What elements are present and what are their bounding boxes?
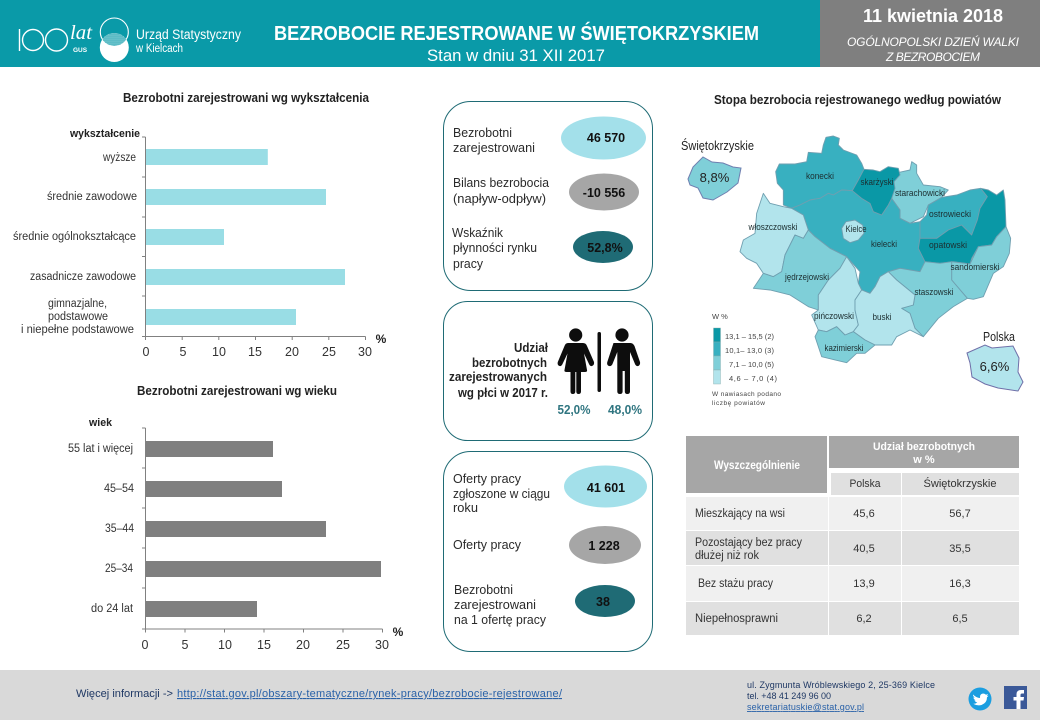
bubble: -10 556: -10 556 xyxy=(583,186,625,200)
category labels: 25–34 xyxy=(105,563,134,575)
panel: unemployment summary xyxy=(444,102,652,290)
legend: 7,1 – 10,0 (5) xyxy=(729,360,774,369)
category labels xyxy=(68,443,135,615)
label: Polska: Polska xyxy=(983,330,1015,344)
map panel xyxy=(681,93,1023,407)
category labels: wyższe xyxy=(102,152,136,164)
legend: 4,6 – 7,0 (4) xyxy=(729,374,778,383)
map title: Stopa bezrobocia rejestrowanego według powiatów xyxy=(714,93,1001,107)
legend: W % xyxy=(712,312,728,321)
row: Mieszkający na wsi: Mieszkający na wsi xyxy=(695,508,785,520)
logo: 100 lat GUS: GUS xyxy=(73,47,88,54)
category labels: gimnazjalne, xyxy=(48,298,107,310)
label: unemployed per offer: zarejestrowani xyxy=(454,597,536,612)
title: BEZROBOCIE REJESTROWANE W ŚWIĘTOKRZYSKIEM xyxy=(274,21,759,45)
category labels: średnie zawodowe xyxy=(47,191,137,203)
row: Pozostający bez pracy: dłużej niż rok xyxy=(695,550,759,562)
county labels: kielecki xyxy=(871,239,897,250)
row: Pozostający bez pracy xyxy=(686,531,1019,565)
tick labels: 25 xyxy=(322,345,336,359)
tick labels xyxy=(143,345,372,359)
label: balance: (napływ-odpływ) xyxy=(453,191,546,206)
county labels: włoszczowski xyxy=(748,222,798,233)
logo: Urząd Statystyczny xyxy=(100,18,241,62)
value: men 48,0%: 48,0% xyxy=(608,403,642,417)
label: balance: Bilans bezrobocia xyxy=(453,175,550,190)
heading: gender share: Udział xyxy=(514,341,548,355)
county labels: kazimierski xyxy=(824,343,864,354)
tick labels xyxy=(142,638,389,652)
county labels: buski xyxy=(872,312,892,323)
legend: 10,1– 13,0 (3) xyxy=(725,346,774,355)
category labels: 35–44 xyxy=(105,523,135,535)
table xyxy=(686,436,1019,635)
row: Mieszkający na wsi: 45,6 xyxy=(853,508,875,520)
heading: gender share: wg płci w 2017 r. xyxy=(457,386,548,400)
bubble: 41 601: 41 601 xyxy=(587,481,625,495)
county labels: skarżyski xyxy=(860,177,894,188)
bubble: 52,8%: 52,8% xyxy=(587,241,623,255)
table header: Świętokrzyskie xyxy=(924,477,996,490)
chart title: Bezrobotni zarejestrowani wg wykształcenia xyxy=(123,91,370,105)
row: Niepełnosprawni: 6,5 xyxy=(952,613,968,625)
header band xyxy=(0,0,820,67)
legend xyxy=(712,312,781,407)
county labels: sandomierski xyxy=(950,262,1000,273)
bubble: 52,8% xyxy=(573,231,633,263)
label: registered unemployed: zarejestrowani xyxy=(453,140,535,155)
axes xyxy=(142,137,366,340)
row: Bez stażu pracy: 16,3 xyxy=(949,578,971,590)
tick labels: 10 xyxy=(218,638,232,652)
axis label: wiek: wiek xyxy=(88,417,113,429)
logo: Urząd Statystyczny: w Kielcach xyxy=(135,43,183,55)
date box: Z BEZROBOCIEM xyxy=(885,50,980,64)
category labels xyxy=(13,152,137,336)
heading: gender share: bezrobotnych xyxy=(472,356,547,370)
more information link: Więcej informacji -> xyxy=(76,688,173,700)
heading: gender share: zarejestrowanych xyxy=(449,370,547,384)
row: Mieszkający na wsi xyxy=(686,497,1019,530)
legend: 13,1 – 15,5 (2) xyxy=(725,332,774,341)
more information link: http://stat.gov.pl/obszary-tematyczne/rynek-pracy/bezrobocie-rejestrowane/ xyxy=(177,688,563,700)
county labels xyxy=(748,171,1000,354)
bubble: 41 601 xyxy=(564,466,647,508)
tick labels: 0 xyxy=(142,638,149,652)
region shape: Świętokrzyskie 8,8% xyxy=(688,157,741,200)
label: offers: Oferty pracy xyxy=(453,537,521,552)
row: Bez stażu pracy xyxy=(686,566,1019,601)
contact details: sekretariatuskie@stat.gov.pl xyxy=(747,702,864,712)
chart: age xyxy=(68,384,404,652)
region shape: Świętokrzyskie 8,8%: 8,8% xyxy=(700,170,730,185)
row: Pozostający bez pracy: 35,5 xyxy=(949,543,971,555)
county labels: Kielce xyxy=(846,224,866,235)
bubble: 46 570 xyxy=(561,116,646,160)
divider xyxy=(598,332,601,392)
bubble: 1 228: 1 228 xyxy=(588,539,620,553)
bars xyxy=(146,441,381,617)
tick labels: 5 xyxy=(182,638,189,652)
footer xyxy=(0,670,1040,720)
category labels: średnie ogólnokształcące xyxy=(13,231,136,243)
category labels: 45–54 xyxy=(104,483,135,495)
tick labels: 20 xyxy=(285,345,299,359)
bubble: 46 570: 46 570 xyxy=(587,131,625,145)
bars xyxy=(146,149,345,325)
county labels: opatowski xyxy=(929,240,967,251)
icon: woman xyxy=(558,328,594,394)
icon: man xyxy=(607,328,640,394)
tick labels: 10 xyxy=(212,345,226,359)
row: Niepełnosprawni: Niepełnosprawni xyxy=(695,613,778,625)
tick labels: 5 xyxy=(180,345,187,359)
bubble: -10 556 xyxy=(569,174,639,210)
value: women 52,0%: 52,0% xyxy=(558,403,590,417)
logo: Urząd Statystyczny: Urząd Statystyczny xyxy=(136,27,241,42)
label: liquidity indicator: płynności rynku xyxy=(453,240,537,255)
chart: education xyxy=(13,91,387,359)
bubble: 38 xyxy=(575,585,635,617)
county labels: ostrowiecki xyxy=(929,209,971,220)
table header: Udział bezrobotnych xyxy=(873,441,975,453)
choropleth map xyxy=(740,136,1011,363)
region shape: Polska 6,6% xyxy=(967,345,1023,391)
panel: job offers xyxy=(444,452,652,652)
county labels: staszowski xyxy=(914,287,954,298)
tick labels: 15 xyxy=(248,345,262,359)
contact details: tel. +48 41 249 96 00 xyxy=(747,691,831,701)
icon: twitter xyxy=(968,688,992,710)
row: Bez stażu pracy: Bez stażu pracy xyxy=(698,578,773,590)
label: offers reported: zgłoszone w ciągu xyxy=(453,486,550,501)
category labels: zasadnicze zawodowe xyxy=(30,271,136,283)
tick labels: 30 xyxy=(375,638,389,652)
bubble: 1 228 xyxy=(569,526,641,564)
row: Bez stażu pracy: 13,9 xyxy=(853,578,875,590)
tick labels: 25 xyxy=(336,638,350,652)
county labels: jędrzejowski xyxy=(784,272,829,283)
contact details: ul. Zygmunta Wróblewskiego 2, 25-369 Kielce xyxy=(747,680,935,690)
table header xyxy=(686,436,1019,495)
panel: share by gender xyxy=(444,302,652,440)
county labels: konecki xyxy=(806,171,834,182)
legend: W nawiasach podano xyxy=(712,391,781,398)
tick labels: 15 xyxy=(257,638,271,652)
logo: 100 lat GUS xyxy=(20,22,92,54)
row: Pozostający bez pracy: Pozostający bez pracy xyxy=(695,537,802,549)
row: Mieszkający na wsi: 56,7 xyxy=(949,508,971,520)
label: Świętokrzyskie: Świętokrzyskie xyxy=(681,138,754,153)
category labels: podstawowe xyxy=(48,311,108,323)
chart title: Bezrobotni zarejestrowani wg wieku xyxy=(137,384,337,398)
subtitle: Stan w dniu 31 XII 2017 xyxy=(427,47,605,65)
contact details xyxy=(747,680,935,712)
legend: liczbę powiatów xyxy=(712,400,765,407)
row: Pozostający bez pracy: 40,5 xyxy=(853,543,875,555)
date box xyxy=(820,0,1040,67)
label: offers reported: roku xyxy=(453,500,478,515)
unit: % xyxy=(376,332,387,346)
logo: 100 lat GUS: lat xyxy=(70,22,92,44)
axis label: wykształcenie: wykształcenie xyxy=(69,128,140,140)
county labels: pińczowski xyxy=(814,311,854,322)
label: liquidity indicator: Wskaźnik xyxy=(452,225,503,240)
icon: facebook xyxy=(1004,686,1027,709)
label: registered unemployed: Bezrobotni xyxy=(453,125,512,140)
date box: OGÓLNOPOLSKI DZIEŃ WALKI xyxy=(847,34,1020,49)
row: Niepełnosprawni: 6,2 xyxy=(856,613,872,625)
table header: Polska xyxy=(850,478,881,490)
label: unemployed per offer: na 1 ofertę pracy xyxy=(454,612,546,627)
label: unemployed per offer: Bezrobotni xyxy=(454,582,513,597)
label: liquidity indicator: pracy xyxy=(453,256,483,271)
tick labels: 0 xyxy=(143,345,150,359)
row: Niepełnosprawni xyxy=(686,602,1019,635)
label: offers reported: Oferty pracy xyxy=(453,471,521,486)
tick labels: 20 xyxy=(296,638,310,652)
category labels: i niepełne podstawowe xyxy=(21,324,134,336)
table header: Wyszczególnienie xyxy=(714,460,800,472)
category labels: 55 lat i więcej xyxy=(68,443,133,455)
table header: w % xyxy=(912,454,935,466)
county labels: starachowicki xyxy=(895,188,945,199)
date box: 11 kwietnia 2018 xyxy=(863,6,1003,26)
category labels: do 24 lat xyxy=(91,603,134,615)
region shape: Polska 6,6%: 6,6% xyxy=(980,359,1010,374)
axes xyxy=(142,428,382,632)
unit: % xyxy=(393,625,404,639)
tick labels: 30 xyxy=(358,345,372,359)
bubble: 38: 38 xyxy=(596,595,610,609)
